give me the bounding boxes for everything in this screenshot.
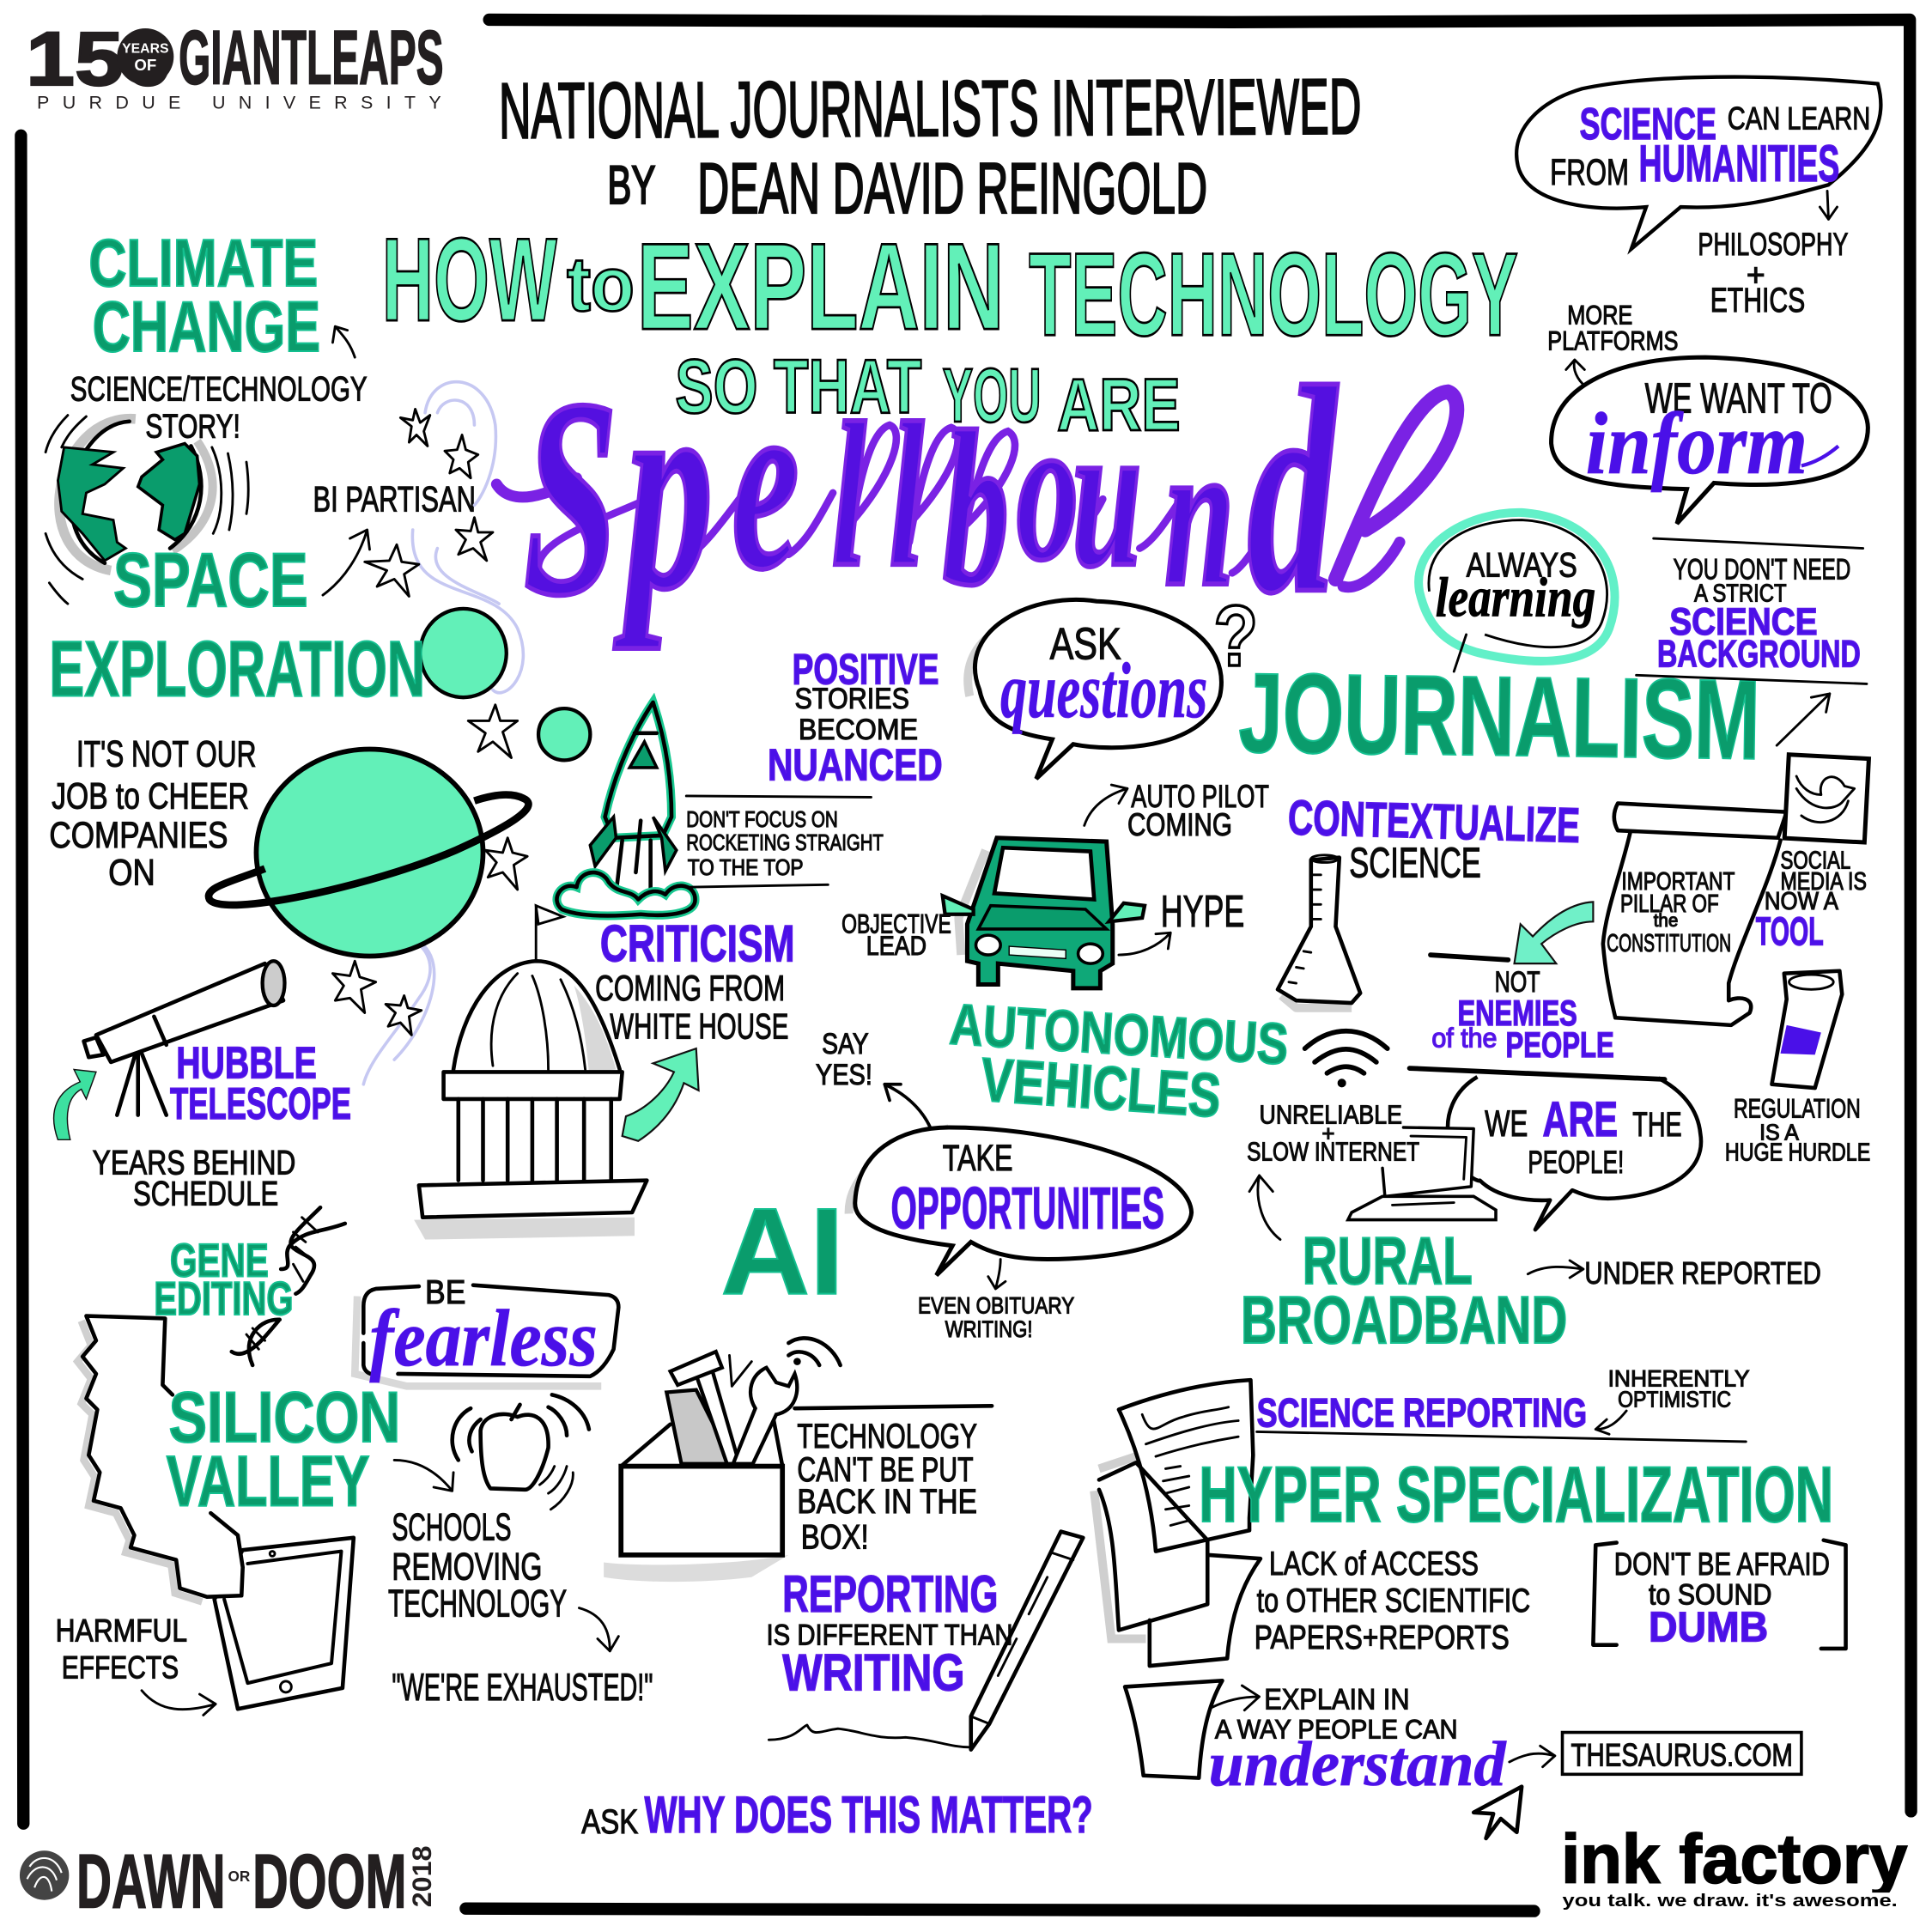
speech bubble: we are the people (1410, 1068, 1701, 1230)
hype: HYPE (1161, 886, 1244, 936)
logo: 150 years of giant leaps: GIANTLEAPS (179, 15, 444, 100)
icon: rocket (556, 702, 696, 915)
heading: how to explain technology: HOW (382, 214, 557, 346)
bubble: always learning: ALWAYS (1467, 546, 1577, 585)
reporting is different than writing (767, 1564, 1013, 1702)
speech bubble: ask questions: questions (1000, 647, 1207, 734)
thesaurus.com box: THESAURUS.COM (1571, 1736, 1793, 1772)
explain in a way people can understand: A WAY PEOPLE CAN (1215, 1714, 1458, 1745)
speech bubble: we are the people: PEOPLE! (1528, 1144, 1624, 1180)
technology can't be put back: BACK IN THE (797, 1482, 977, 1521)
icon: scroll: IMPORTANT (1621, 868, 1735, 896)
icon: twitter box (1784, 755, 1868, 842)
under reported: UNDER REPORTED (1584, 1256, 1821, 1291)
more platforms (1547, 299, 1678, 387)
contextualize science: SCIENCE (1349, 841, 1481, 887)
technology can't be put back: BOX! (801, 1518, 869, 1557)
rural broadband: RURAL (1303, 1224, 1473, 1298)
years behind schedule (93, 1144, 295, 1212)
icon: paper cup (1125, 1680, 1222, 1778)
speech bubble: science can learn from humanities: FROM (1550, 152, 1629, 193)
speech bubble: we are the people: WE (1485, 1103, 1528, 1145)
reporting is different than writing: IS DIFFERENT THAN (767, 1619, 1013, 1652)
criticism from white house: WHITE HOUSE (610, 1006, 788, 1047)
years behind schedule: YEARS BEHIND (93, 1144, 295, 1182)
lack of access: to OTHER SCIENTIFIC (1257, 1583, 1530, 1619)
note: not our job to cheer: JOB to CHEER (52, 775, 249, 817)
philosophy and ethics: + (1747, 257, 1765, 293)
bracket note: don't be afraid to sound dumb: DON'T BE AFRAID (1614, 1546, 1830, 1582)
icon: flask (1278, 855, 1360, 1008)
say yes with arrow: YES! (816, 1059, 872, 1091)
climate change label: CLIMATE (88, 227, 318, 301)
contextualize science: CONTEXTUALIZE (1287, 790, 1581, 854)
logo: ink factory: you talk. we draw. it's awesome. (1563, 1892, 1898, 1911)
gene editing label: EDITING (154, 1273, 294, 1325)
arrow to bi partisan (323, 530, 369, 595)
heading: spellbound: o (1017, 374, 1078, 603)
arrow to science background (1777, 694, 1830, 745)
heading: spellbound: l (832, 380, 866, 609)
heading: how to explain technology: to (567, 241, 635, 327)
technology can't be put back (795, 1406, 992, 1557)
hubble telescope label: HUBBLE (176, 1038, 317, 1088)
heading: spellbound (496, 325, 1457, 655)
hubble telescope label (170, 1038, 351, 1128)
speech bubble: ask questions: ASK (1050, 619, 1121, 669)
AI label: AI (720, 1183, 844, 1321)
note: not our job to cheer: IT'S NOT OUR (76, 734, 256, 775)
thesaurus.com box (1510, 1733, 1801, 1774)
harmful effects: EFFECTS (62, 1649, 179, 1685)
harmful effects (56, 1612, 187, 1685)
heading: spellbound: b (943, 386, 1009, 632)
arrow to unreliable internet (1249, 1176, 1280, 1240)
positive stories: NUANCED (768, 739, 943, 789)
bubble: always learning: learning (1436, 566, 1595, 629)
note: no strict science background: YOU DON'T NEED (1674, 553, 1850, 586)
icon: globe (46, 416, 248, 604)
icon: scroll: the (1654, 910, 1678, 931)
speech bubble: ask questions (968, 599, 1221, 779)
ask why does this matter: WHY DOES THIS MATTER? (644, 1785, 1093, 1844)
note: don't focus on rocketing: DON'T FOCUS ON (686, 808, 838, 832)
explain in a way people can understand (1209, 1683, 1507, 1800)
note: don't focus on rocketing: TO THE TOP (688, 856, 804, 880)
heading: spellbound: p (612, 328, 714, 650)
icon: moon (538, 708, 590, 760)
contextualize science (1287, 790, 1581, 887)
speech bubble: we want to inform (1552, 357, 1868, 524)
note: don't focus on rocketing: ROCKETING STRAIGHT (686, 831, 884, 855)
explain in a way people can understand: understand (1209, 1729, 1507, 1800)
rural broadband: BROADBAND (1241, 1284, 1567, 1358)
icon: regulation marker (1771, 971, 1842, 1088)
heading: spellbound: u (1072, 378, 1142, 611)
objective lead: LEAD (866, 930, 927, 961)
climate change label: CHANGE (93, 287, 320, 367)
rural broadband (1241, 1224, 1567, 1358)
positive stories: POSITIVE (793, 645, 939, 693)
philosophy and ethics: ETHICS (1710, 281, 1805, 319)
gene editing label (154, 1235, 294, 1325)
bubble: always learning (1419, 513, 1615, 671)
even obituary writing: WRITING! (945, 1315, 1032, 1342)
icon: scroll (1603, 804, 1787, 1025)
unreliable slow internet (1247, 1102, 1419, 1167)
green arrow from capitol (623, 1048, 699, 1141)
positive stories (768, 645, 943, 789)
regulation is a huge hurdle (1725, 1092, 1870, 1167)
speech bubble: we are the people: THE (1632, 1105, 1682, 1144)
speech bubble: take opportunities: TAKE (943, 1138, 1013, 1179)
climate change label (88, 227, 320, 367)
note: no strict science background: SCIENCE (1669, 601, 1818, 643)
space label: SPACE (113, 537, 308, 623)
science technology story (70, 369, 368, 445)
speech bubble: take opportunities: OPPORTUNITIES (890, 1176, 1164, 1242)
icon: toolbox (604, 1338, 841, 1582)
not enemies of the people: PEOPLE (1506, 1024, 1614, 1065)
ask why does this matter: ASK (581, 1802, 638, 1841)
speech bubble: science can learn from humanities: SCIENCE (1580, 99, 1716, 149)
bracket note: don't be afraid to sound dumb: DUMB (1649, 1604, 1768, 1650)
lack of access (1255, 1546, 1530, 1656)
philosophy and ethics: PHILOSOPHY (1698, 226, 1849, 262)
icon: california outline (77, 1316, 243, 1601)
criticism from white house: COMING FROM (595, 968, 785, 1008)
heading: so that you are: SO THAT (675, 343, 921, 429)
regulation is a huge hurdle: IS A (1759, 1121, 1800, 1145)
icon: tablet (215, 1538, 354, 1709)
social media now a tool: MEDIA IS (1781, 868, 1867, 896)
not enemies of the people: ENEMIES (1458, 993, 1577, 1033)
be fearless: BE (425, 1274, 465, 1311)
technology can't be put back: TECHNOLOGY (797, 1417, 977, 1455)
icon: car (943, 838, 1145, 988)
logo: 150 years of giant leaps: YEARS (122, 42, 168, 57)
inherently optimistic (1595, 1364, 1750, 1434)
regulation is a huge hurdle: REGULATION (1734, 1092, 1861, 1123)
silicon valley label: VALLEY (167, 1442, 369, 1522)
not enemies of the people: of the (1431, 1023, 1497, 1054)
social media now a tool: TOOL (1756, 909, 1824, 954)
speech bubble: we are the people: ARE (1543, 1092, 1618, 1147)
logo: dawn or doom 2018: 2018 (406, 1846, 437, 1907)
social media now a tool: SOCIAL (1781, 848, 1850, 875)
autonomous vehicles: VEHICLES (979, 1046, 1223, 1131)
schools removing technology: SCHOOLS (392, 1507, 512, 1549)
speech bubble: science can learn from humanities: CAN LEARN (1728, 100, 1870, 137)
heading: spellbound: n (1164, 398, 1234, 630)
autopilot coming: AUTO PILOT (1131, 778, 1269, 814)
icon: telescope (84, 961, 284, 1115)
subtitle: by dean david reingold: BY (607, 155, 655, 216)
speech bubble: science can learn from humanities (1516, 77, 1880, 249)
heading: spellbound: S (524, 340, 618, 654)
heading: so that you are: YOU (943, 352, 1042, 438)
philosophy and ethics (1698, 191, 1849, 319)
bracket note: don't be afraid to sound dumb: to SOUND (1649, 1578, 1771, 1611)
subtitle: by dean david reingold (607, 149, 1207, 228)
logo: 150 years of giant leaps: 150 (26, 15, 173, 101)
green arrow from scroll (1515, 902, 1593, 963)
speech bubble: we want to inform: WE WANT TO (1645, 376, 1832, 422)
logo: 150 years of giant leaps: PURDUE UNIVERSITY (37, 92, 441, 112)
unreliable slow internet: SLOW INTERNET (1247, 1139, 1419, 1167)
schools removing technology (388, 1507, 567, 1625)
icon: ringed planet (209, 749, 528, 957)
icon: scroll: PILLAR OF (1620, 890, 1719, 918)
icon: papers stack (1094, 1380, 1261, 1666)
say yes with arrow: SAY (822, 1028, 869, 1060)
heading: how to explain technology: EXPLAIN (637, 218, 1004, 355)
note: not our job to cheer: ON (108, 852, 155, 893)
icon: wifi (1305, 1031, 1388, 1087)
social media now a tool: NOW A (1765, 888, 1839, 915)
question mark: ? (1213, 588, 1258, 684)
arrow to climate change (332, 326, 355, 357)
heading: spellbound: l (890, 380, 924, 609)
note: don't focus on rocketing (686, 796, 884, 887)
not enemies of the people: NOT (1495, 966, 1540, 999)
heading: spellbound: e (732, 343, 799, 622)
lack of access: LACK of ACCESS (1269, 1546, 1479, 1583)
explain in a way people can understand: EXPLAIN IN (1264, 1683, 1410, 1716)
autopilot coming: COMING (1127, 806, 1232, 842)
even obituary writing: EVEN OBITUARY (918, 1292, 1074, 1319)
heading: spellbound: d (1247, 325, 1339, 655)
harmful effects: HARMFUL (56, 1612, 187, 1648)
social media now a tool (1756, 848, 1867, 954)
note: no strict science background: BACKGROUND (1657, 633, 1861, 675)
note: not our job to cheer (49, 734, 256, 893)
autonomous vehicles: AUTONOMOUS (948, 993, 1290, 1077)
positive stories: STORIES (795, 683, 909, 715)
heading: how to explain technology (382, 214, 1518, 361)
even obituary writing (918, 1260, 1074, 1342)
heading: so that you are: ARE (1057, 364, 1181, 447)
icon: scroll: CONSTITUTION (1607, 930, 1731, 957)
logo: dawn or doom 2018 (20, 1838, 437, 1923)
stars (332, 409, 527, 1035)
logo: dawn or doom 2018: OR (228, 1868, 251, 1885)
schools removing technology: TECHNOLOGY (388, 1583, 567, 1625)
inherently optimistic: INHERENTLY (1608, 1364, 1750, 1391)
gene editing label: GENE (170, 1235, 269, 1287)
hubble telescope label: TELESCOPE (170, 1078, 351, 1128)
arrow to schools (394, 1460, 453, 1491)
reporting is different than writing: WRITING (782, 1643, 965, 1702)
icon: dna (232, 1207, 345, 1365)
criticism from white house: CRITICISM (600, 914, 795, 972)
criticism from white house (595, 914, 795, 1047)
green arrow to telescope (54, 1070, 96, 1139)
objective lead (841, 908, 951, 961)
silicon valley label (167, 1377, 400, 1522)
icon: capitol building (414, 906, 647, 1240)
logo: 150 years of giant leaps: OF (134, 56, 156, 74)
bi partisan label: BI PARTISAN (313, 479, 476, 519)
logo: ink factory: ink factory (1561, 1821, 1908, 1899)
arrow down (579, 1608, 618, 1651)
icon: apple with signal (453, 1394, 589, 1510)
exploration label: EXPLORATION (49, 626, 425, 714)
unreliable slow internet: UNRELIABLE (1260, 1102, 1402, 1130)
schools removing technology: REMOVING (392, 1546, 542, 1589)
science reporting: SCIENCE REPORTING (1257, 1391, 1587, 1437)
swirls (345, 382, 523, 1084)
not enemies of the people (1431, 955, 1614, 1065)
ask why does this matter (581, 1785, 1093, 1844)
regulation is a huge hurdle: HUGE HURDLE (1725, 1139, 1870, 1167)
note: no strict science background: A STRICT (1694, 580, 1787, 607)
logo: 150 years of giant leaps (26, 15, 444, 112)
inherently optimistic: OPTIMISTIC (1618, 1388, 1731, 1413)
unreliable slow internet: + (1321, 1122, 1334, 1146)
years behind schedule: SCHEDULE (133, 1174, 278, 1212)
speech bubble: take opportunities (849, 1127, 1192, 1275)
under reported (1528, 1256, 1821, 1291)
icon: cursor (1473, 1787, 1522, 1838)
more platforms: PLATFORMS (1547, 325, 1678, 356)
icon: laptop (1348, 1127, 1496, 1220)
arrow to tablet (142, 1691, 216, 1715)
speech bubble: we want to inform: inform (1586, 395, 1807, 493)
note: not our job to cheer: COMPANIES (49, 815, 228, 856)
objective lead: OBJECTIVE (841, 908, 951, 939)
icon: pencil (769, 1532, 1083, 1750)
more platforms: MORE (1567, 299, 1632, 330)
be fearless: fearless (369, 1294, 598, 1383)
science technology story: SCIENCE/TECHNOLOGY (70, 369, 368, 408)
positive stories: BECOME (799, 714, 918, 746)
lack of access: PAPERS+REPORTS (1255, 1619, 1510, 1656)
icon: small planet (420, 609, 507, 697)
bracket note: don't be afraid to sound dumb (1593, 1540, 1846, 1650)
autopilot coming (1084, 778, 1269, 842)
science technology story: STORY! (145, 408, 240, 445)
hype (1119, 886, 1244, 955)
say yes with arrow (816, 1028, 930, 1127)
technology can't be put back: CAN'T BE PUT (797, 1450, 974, 1489)
logo: dawn or doom 2018: DOOM (252, 1838, 407, 1923)
heading: how to explain technology: TECHNOLOGY (1029, 228, 1518, 361)
autonomous vehicles (948, 993, 1290, 1131)
subtitle: by dean david reingold: DEAN DAVID REINGOLD (697, 149, 1207, 228)
note: no strict science background (1637, 538, 1867, 683)
heading: so that you are (675, 343, 1181, 447)
we're exhausted quote: "WE'RE EXHAUSTED!" (392, 1667, 653, 1709)
silicon valley label: SILICON (169, 1377, 400, 1457)
reporting is different than writing: REPORTING (782, 1564, 998, 1623)
logo: dawn or doom 2018: DAWN (76, 1838, 226, 1923)
